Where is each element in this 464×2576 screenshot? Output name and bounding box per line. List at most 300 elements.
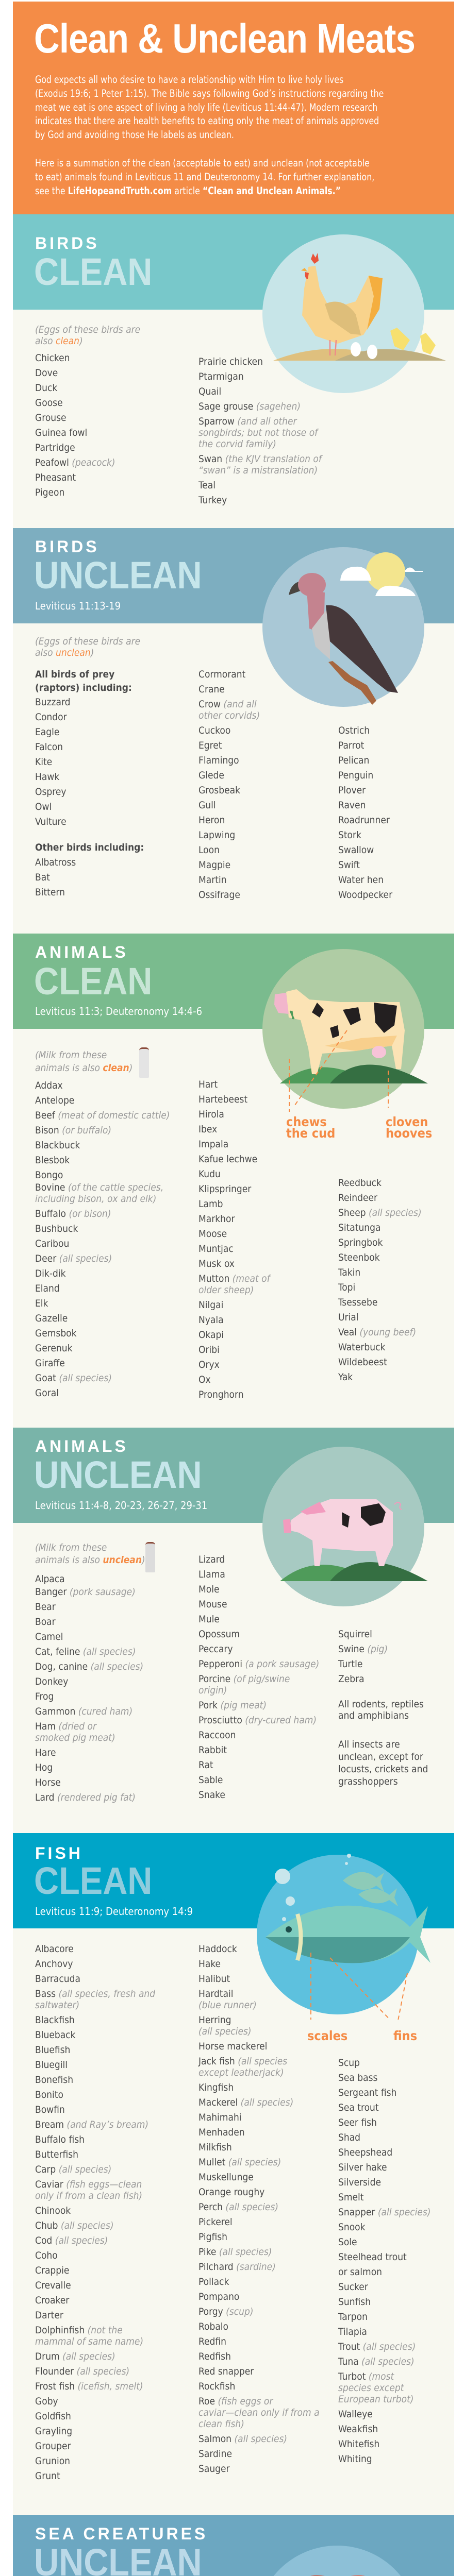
list: fish clean: Pickerel [198,2216,233,2228]
list: birds unclean: Other birds including: [35,842,144,853]
list: fish clean [35,1943,430,2482]
list: animals unclean: All rodents, reptiles [338,1699,424,1710]
list: birds unclean: Kite [35,756,52,768]
list: fish clean: Blackfish [35,2014,75,2026]
list: fish clean: Barracuda [35,1973,80,1985]
title: Clean & Unclean Meats [34,15,415,61]
heading: fish clean: CLEAN [34,1859,152,1902]
list: animals clean: Blesbok [35,1155,70,1166]
panel: sea creatures unclean [13,2515,454,2576]
list: animals clean: Tsessebe [338,1297,377,1308]
heading: animals clean: CLEAN [34,960,152,1003]
heading: birds unclean [34,537,202,612]
list: fish clean: Menhaden [198,2127,245,2138]
list: fish clean: Snapper (all species) [338,2207,430,2218]
icon: milk bottle [145,1542,155,1572]
list: fish clean: Crappie [35,2265,69,2276]
panel: animals unclean [13,1428,454,1523]
list: birds clean: Turkey [198,495,227,506]
list: fish clean: except leatherjack) [198,2067,284,2078]
note: eggs unclean: (Eggs of these birds are [35,636,140,647]
label: cloven hooves: cloven [386,1114,428,1129]
heading: animals unclean: UNCLEAN [34,1453,202,1496]
intro paragraph [35,74,384,141]
list: animals clean: Reedbuck [338,1177,382,1189]
list: birds unclean: Water hen [338,874,384,886]
note: eggs clean: (Eggs of these birds are [35,324,140,335]
list: fish clean: Mahimahi [198,2112,242,2123]
list: fish clean: Hake [198,1958,221,1970]
list: fish clean: Pigfish [198,2231,227,2243]
list: animals unclean: Frog [35,1691,54,1702]
list: fish clean: Milkfish [198,2142,232,2153]
list: fish clean: Chub (all species) [35,2220,114,2231]
list: fish clean: Kingfish [198,2082,234,2093]
icon: pig [262,1447,428,1606]
list: animals unclean: Camel [35,1631,63,1642]
list: fish clean: Haddock [198,1943,237,1955]
list: birds unclean: Swallow [338,844,374,856]
list: animals clean: Okapi [198,1329,224,1341]
list: animals unclean: unclean, except for [338,1751,423,1762]
list: animals clean: Kudu [198,1168,221,1180]
list: birds clean [35,324,323,506]
note: eggs clean [35,324,140,347]
intro paragraph: by God and avoiding those He labels as unclean. [35,129,234,141]
list: fish clean: Coho [35,2250,58,2261]
list: animals clean: Urial [338,1312,359,1323]
list: fish clean: Snook [338,2222,366,2233]
list: fish clean: Rockfish [198,2381,235,2392]
list: fish clean: Trout (all species) [338,2341,416,2352]
icon: milk bottle [139,1047,149,1078]
icon: chicken [262,234,446,393]
list: fish clean: Mullet (all species) [198,2157,281,2168]
list: birds unclean: Eagle [35,726,59,738]
list: animals unclean: Boar [35,1616,56,1628]
list: animals clean: Waterbuck [338,1342,385,1353]
list: animals clean: Markhor [198,1213,235,1225]
list: fish clean: Goby [35,2396,58,2407]
list: animals unclean: locusts, crickets and [338,1764,428,1775]
list: animals unclean: Squirrel [338,1629,372,1640]
list: birds clean: Pigeon [35,487,64,498]
list: birds clean: Pheasant [35,472,76,483]
list: birds unclean: Pelican [338,755,369,766]
list: animals unclean: Pork (pig meat) [198,1700,267,1711]
list: birds clean: “swan” is a mistranslation) [198,465,318,476]
list: fish clean: Sunfish [338,2296,371,2308]
list: animals clean: Moose [198,1228,227,1240]
list: birds unclean: Vulture [35,816,67,827]
list: animals unclean: Llama [198,1569,225,1580]
list: animals clean: Dik-dik [35,1268,66,1279]
list: birds clean: Dove [35,367,58,379]
list: animals unclean: Turtle [338,1658,362,1670]
list: birds unclean: Owl [35,801,52,812]
icon: vulture [262,547,424,707]
list: birds unclean: Ossifrage [198,889,240,901]
list: birds unclean: other corvids) [198,710,260,721]
heading: animals clean [34,943,202,1018]
list: fish clean: Sauger [198,2463,230,2475]
list: fish clean: Bream (and Ray’s bream) [35,2119,148,2130]
list: animals clean: Blackbuck [35,1140,80,1151]
list: birds unclean: Flamingo [198,755,239,766]
list: fish clean: Cod (all species) [35,2235,108,2246]
intro paragraph: (Exodus 19:6; 1 Peter 1:15). The Bible says following God’s instructions regarding the [35,88,384,99]
list: animals clean: Muntjac [198,1243,234,1255]
list: animals clean: Sitatunga [338,1222,380,1233]
panel: fish clean [13,1833,454,1928]
list: fish clean: Carp (all species) [35,2164,111,2175]
list: fish clean: caviar—clean only if from a [198,2407,320,2418]
list: animals unclean: grasshoppers [338,1776,398,1787]
list: fish clean: Smelt [338,2192,363,2203]
note: milk clean [35,1049,132,1074]
list: birds unclean: Heron [198,815,225,826]
heading: birds unclean: BIRDS [35,537,100,556]
summary paragraph: to eat) animals found in Leviticus 11 and Deuteronomy 14. For further explanation, [35,171,374,183]
list: animals clean: Gazelle [35,1313,68,1324]
list: animals clean: Gemsbok [35,1328,77,1339]
list: animals unclean: Sable [198,1774,223,1786]
list: fish clean: only if from a clean fish) [35,2190,142,2201]
note: milk clean: animals is also clean) [35,1062,132,1074]
list: fish clean: Bowfin [35,2104,65,2115]
list: fish clean: Muskellunge [198,2172,254,2183]
list: animals unclean: Alpaca [35,1573,65,1585]
list: animals clean: Topi [338,1282,355,1293]
label: scales: scales [307,2028,347,2043]
list: birds unclean: (raptors) including: [35,682,132,693]
list: birds clean: Prairie chicken [198,356,263,367]
icon: cow [262,949,428,1112]
summary paragraph: Here is a summation of the clean (acceptable to eat) and unclean (not acceptable [35,157,370,169]
list: animals clean: Elk [35,1298,48,1309]
list: animals clean: Goat (all species) [35,1372,112,1384]
list: animals unclean: Mole [198,1584,219,1595]
list: animals unclean: Gammon (cured ham) [35,1706,132,1717]
list: birds unclean: Glede [198,770,224,781]
list: fish clean: Redfish [198,2351,231,2362]
list: fish clean: Pompano [198,2291,239,2302]
list: fish clean: Walleye [338,2409,373,2420]
list: animals clean: Wildebeest [338,1357,387,1368]
list: birds unclean: Penguin [338,770,373,781]
list: fish clean: Tilapia [338,2326,367,2337]
list: animals unclean: Raccoon [198,1730,236,1741]
list: animals clean [35,1047,422,1400]
list: animals clean: Hirola [198,1109,224,1120]
list: fish clean: Whiting [338,2453,372,2465]
list: fish clean: Bonito [35,2089,63,2100]
list: animals unclean: Mule [198,1614,220,1625]
list: animals clean: including bison, ox and elk) [35,1193,156,1205]
list: animals unclean: Banger (pork sausage) [35,1586,136,1598]
list: birds unclean: All birds of prey [35,669,114,680]
list: animals clean: Deer (all species) [35,1253,112,1264]
heading: birds clean: CLEAN [34,250,152,293]
header panel [13,2,454,214]
list: animals clean: Hart [198,1079,218,1090]
list: fish clean: Grouper [35,2441,71,2452]
summary paragraph [35,157,374,197]
list: animals unclean: Hare [35,1747,56,1758]
intro paragraph: indicates that there are health benefits to eating only the meat of animals approved [35,115,379,127]
list: fish clean: Croaker [35,2295,69,2306]
list: fish clean: Perch (all species) [198,2201,278,2213]
list: fish clean: Grayling [35,2426,72,2437]
list: animals unclean: Bear [35,1601,56,1613]
list: fish clean: Sergeant fish [338,2087,396,2098]
intro paragraph: meat we eat is one aspect of living a holy life (Leviticus 11:44-47). Modern research [35,101,377,113]
list: animals unclean: Horse [35,1777,61,1788]
list: birds clean: Duck [35,382,57,394]
list: animals clean: Lamb [198,1198,223,1210]
list: animals unclean: Opossum [198,1629,240,1640]
list: animals clean: Giraffe [35,1358,65,1369]
list: animals clean: Oribi [198,1344,220,1355]
panel: animals clean [13,934,454,1029]
list: birds clean: Partridge [35,442,75,453]
list: birds unclean: Cormorant [198,669,245,680]
list: fish clean: Shad [338,2132,360,2143]
list: birds unclean: Bat [35,872,50,883]
heading: fish clean: Leviticus 11:9; Deuteronomy 14:9 [35,1905,193,1918]
list: birds unclean: Plover [338,785,366,796]
label: chews the cud: chews [286,1114,327,1129]
list: fish clean: Flounder (all species) [35,2366,129,2377]
list: fish clean: Bonefish [35,2074,73,2086]
list: birds unclean: Condor [35,711,67,723]
list: fish clean: Grunion [35,2455,70,2467]
list: birds clean: Guinea fowl [35,427,87,438]
list: animals clean: Bovine (of the cattle species, [35,1182,163,1193]
note: milk unclean [35,1542,145,1566]
list: birds unclean: Martin [198,874,227,886]
list: fish clean: mammal of same name) [35,2336,143,2347]
list: fish clean: Bass (all species, fresh and [35,1988,155,1999]
list: animals unclean: Hog [35,1762,53,1773]
list: birds unclean: Raven [338,800,366,811]
list: animals clean: Pronghorn [198,1389,244,1400]
list: fish clean: Mackerel (all species) [198,2097,293,2108]
list: animals clean: Veal (young beef) [338,1327,416,1338]
list: animals clean: Bongo [35,1170,63,1181]
list: birds clean: Ptarmigan [198,371,244,382]
list: fish clean: Salmon (all species) [198,2433,287,2445]
list: animals unclean: Porcine (of pig/swine [198,1673,290,1685]
list: birds unclean: Woodpecker [338,889,392,901]
note: milk unclean: animals is also unclean) [35,1554,145,1566]
list: animals clean: Ox [198,1374,211,1385]
list: birds unclean: Bittern [35,887,65,898]
heading: birds unclean: UNCLEAN [34,554,202,597]
label: cloven hooves: hooves [386,1126,432,1141]
list: animals unclean: Pepperoni (a pork sausage) [198,1658,319,1670]
list: birds unclean: Osprey [35,786,66,798]
heading: animals clean: Leviticus 11:3; Deuteronomy 14:4-6 [35,1005,202,1018]
list: fish clean: Sea trout [338,2102,379,2113]
note: milk unclean: (Milk from these [35,1542,107,1553]
list: fish clean: Jack fish (all species [198,2056,287,2067]
list: fish clean: saltwater) [35,1999,79,2011]
list: fish clean: Silverside [338,2177,381,2188]
list: fish clean: Anchovy [35,1958,73,1970]
list: birds unclean: Albatross [35,857,76,868]
list: animals unclean [35,1542,428,1803]
list: fish clean: Sardine [198,2448,232,2460]
list: animals unclean: and amphibians [338,1710,409,1721]
list: fish clean: Pike (all species) [198,2246,272,2258]
list: fish clean: or salmon [338,2266,382,2278]
list: animals clean: Sheep (all species) [338,1207,422,1218]
list: birds clean: Sparrow (and all other [198,416,297,427]
list: fish clean: Horse mackerel [198,2041,267,2052]
note: eggs unclean [35,636,140,658]
summary paragraph: see the LifeHopeandTruth.com article “Clean and Unclean Animals.” [35,185,341,197]
list: birds clean: Grouse [35,412,67,423]
list: birds unclean: Buzzard [35,697,71,708]
list: animals clean: Impala [198,1139,228,1150]
list: animals unclean: Lizard [198,1554,225,1565]
list: animals unclean: Peccary [198,1643,233,1655]
list: fish clean: Tuna (all species) [338,2356,415,2367]
list: animals clean: Musk ox [198,1258,235,1269]
note: milk clean: (Milk from these [35,1049,107,1061]
list: fish clean: Roe (fish eggs or [198,2396,273,2407]
list: fish clean: Frost fish (icefish, smelt) [35,2381,143,2392]
list: fish clean: Chinook [35,2205,71,2216]
list: fish clean: Sucker [338,2281,368,2293]
panel: birds unclean [13,528,454,623]
list: fish clean: Redfin [198,2336,226,2347]
list: animals unclean: Lard (rendered pig fat) [35,1792,136,1803]
list: birds unclean: Gull [198,800,216,811]
list: fish clean: Pollack [198,2276,229,2287]
list: fish clean: Scup [338,2057,360,2069]
list: birds clean: Teal [198,480,216,491]
list: birds clean: Peafowl (peacock) [35,457,115,468]
list: fish clean: clean fish) [198,2418,244,2430]
list: birds unclean: Ostrich [338,725,370,736]
list: birds clean: Chicken [35,352,70,364]
label: cloven hooves [386,1114,432,1141]
label: chews the cud: the cud [286,1126,335,1141]
list: animals unclean: Mouse [198,1599,227,1610]
list: animals clean: Springbok [338,1237,383,1248]
note: eggs clean: also clean) [35,335,83,347]
list: fish clean: Blueback [35,2029,75,2041]
list: birds unclean: Cuckoo [198,725,230,736]
list: fish clean: Bluefish [35,2044,70,2056]
list: fish clean: Seer fish [338,2117,377,2128]
list: fish clean: Whitefish [338,2438,379,2450]
list: fish clean: Hardtail [198,1988,234,1999]
list: animals clean: Gerenuk [35,1343,72,1354]
list: fish clean: Drum (all species) [35,2351,115,2362]
list: birds unclean: Parrot [338,740,364,751]
list: fish clean: Silver hake [338,2162,387,2173]
heading: sea creatures unclean: SEA CREATURES [35,2524,208,2543]
list: fish clean: Goldfish [35,2411,71,2422]
list: birds clean: the corvid family) [198,438,276,450]
list: animals unclean: Ham (dried or [35,1721,96,1732]
list: animals clean: Kafue lechwe [198,1154,257,1165]
list: fish clean: Albacore [35,1943,74,1955]
list: animals clean: Bushbuck [35,1223,78,1234]
label: fins: fins [393,2028,417,2043]
list: animals clean: Beef (meat of domestic cattle) [35,1110,170,1121]
list: fish clean: Crevalle [35,2280,71,2291]
list: fish clean: Grunt [35,2470,60,2482]
list: fish clean: Herring [198,2014,231,2026]
list: fish clean: Halibut [198,1973,230,1985]
list: animals clean: Mutton (meat of [198,1273,270,1284]
heading: fish clean [34,1844,193,1918]
list: animals clean: older sheep) [198,1284,254,1296]
list: birds unclean: Swift [338,859,360,871]
note: eggs unclean: also unclean) [35,647,94,658]
list: fish clean: (all species) [198,2026,252,2037]
list: fish clean: Steelhead trout [338,2251,407,2263]
list: fish clean: Robalo [198,2321,228,2332]
panel: birds clean [13,214,454,310]
list: fish clean: Porgy (scup) [198,2306,254,2317]
list: fish clean: Caviar (fish eggs—clean [35,2179,142,2190]
list: birds unclean: Roadrunner [338,815,390,826]
list: fish clean: Buffalo fish [35,2134,85,2145]
list: fish clean: Turbot (most [338,2371,394,2382]
heading: birds unclean: Leviticus 11:13-19 [35,600,121,612]
list: fish clean: Bluegill [35,2059,68,2071]
heading: animals unclean: ANIMALS [35,1437,128,1455]
list: birds clean: songbirds; but not those of [198,427,318,438]
intro paragraph: God expects all who desire to have a relationship with Him to live holy lives [35,74,343,86]
list: birds unclean: Loon [198,844,220,856]
list: birds clean: Swan (the KJV translation of [198,453,322,465]
heading: birds clean: BIRDS [35,234,100,252]
heading: animals clean: ANIMALS [35,943,128,961]
heading: animals unclean [34,1437,207,1512]
list: animals clean: Nyala [198,1314,224,1326]
list: animals clean: Klipspringer [198,1183,251,1195]
list: birds unclean: Hawk [35,771,59,783]
list: animals clean: Goral [35,1387,59,1399]
list: animals unclean: smoked pig meat) [35,1732,115,1743]
list: fish clean: Pilchard (sardine) [198,2261,276,2273]
list: fish clean: Weakfish [338,2424,378,2435]
list: fish clean: Butterfish [35,2149,78,2160]
list: animals clean: Reindeer [338,1192,377,1204]
heading: animals unclean: Leviticus 11:4-8, 20-23, 26-27, 29-31 [35,1499,207,1512]
list: fish clean: (blue runner) [198,1999,257,2011]
list: fish clean: Sheepshead [338,2147,392,2158]
list: animals unclean: Rabbit [198,1744,227,1756]
list: animals clean: Antelope [35,1095,74,1106]
list: animals unclean: Rat [198,1759,213,1771]
list: fish clean: Red snapper [198,2366,254,2377]
list: animals unclean: Cat, feline (all species) [35,1646,136,1657]
list: fish clean: species except [338,2382,404,2394]
list: animals clean: Eland [35,1283,60,1294]
list: animals unclean: Swine (pig) [338,1643,388,1655]
list: animals clean: Ibex [198,1124,217,1135]
list: animals clean: Yak [338,1371,353,1383]
icon: crab [274,2546,401,2576]
list: birds unclean: Egret [198,740,222,751]
